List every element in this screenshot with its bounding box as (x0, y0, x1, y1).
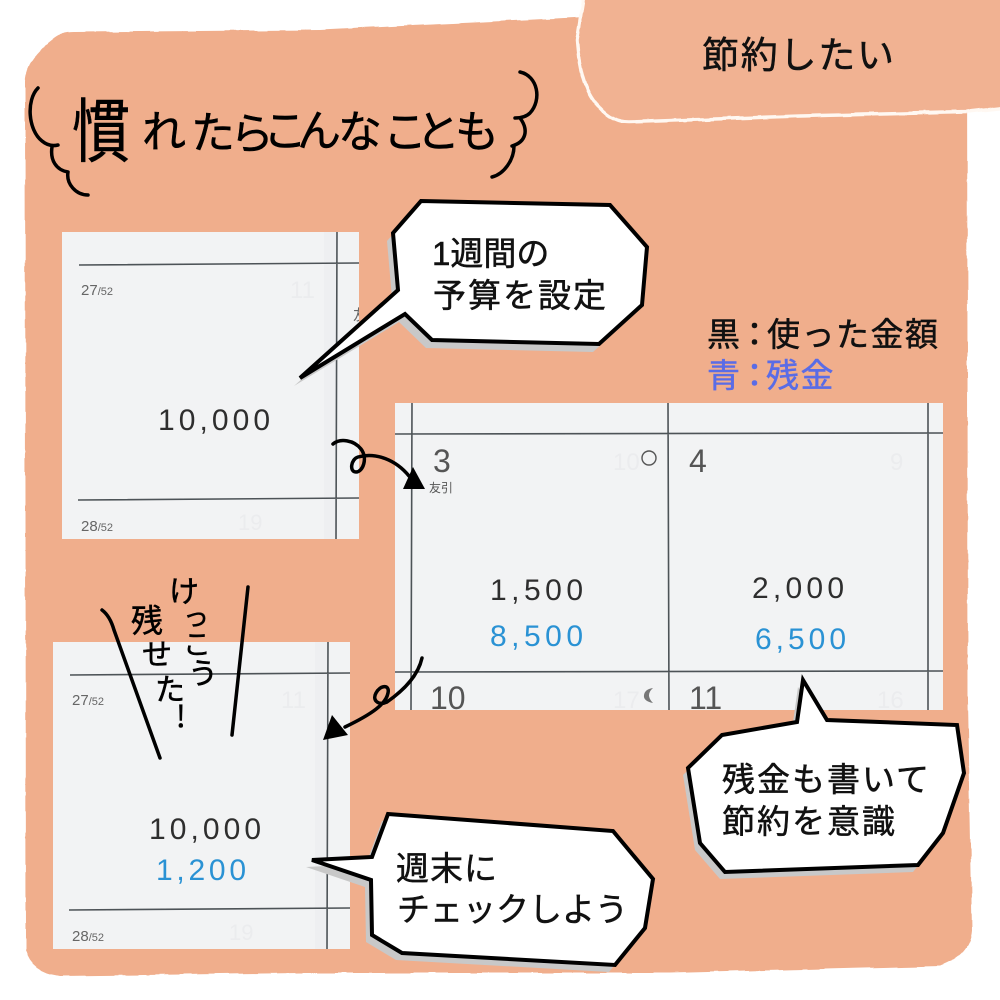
callout: check at the weekend (306, 814, 653, 972)
panel: calendar card 3: 28/52 (72, 928, 104, 945)
arrow: card 1 to card 2 (333, 441, 425, 489)
callout shadow (683, 687, 959, 879)
note text: っ (183, 597, 209, 634)
legend: black is spent amount: 黒 (707, 316, 740, 353)
panel: calendar card 3: 10,000 (149, 813, 261, 846)
panel: calendar card 3: 1,200 (156, 854, 246, 887)
note text: せ (142, 630, 172, 674)
tab shape (577, 0, 1000, 122)
callout shape (312, 814, 653, 965)
callout shadow (294, 209, 641, 386)
handwritten note: saved a lot (102, 567, 248, 758)
panel: calendar card 2: 10 (613, 449, 640, 476)
note text (131, 567, 218, 736)
panel: calendar card 2: 9 (890, 449, 903, 476)
callout shape (300, 201, 647, 378)
panel: calendar card 2: 16 (877, 687, 904, 714)
callout shape (688, 680, 964, 872)
legend: black is spent amount: ： (738, 316, 771, 353)
panel: calendar card 1: 28/52 (81, 518, 113, 535)
note text: 残 (131, 596, 163, 642)
panel: calendar card 2: 11 (689, 680, 722, 716)
callout text: 1週間の (432, 235, 549, 272)
legend: black is spent amount: 使った金額 (767, 316, 940, 353)
panel: calendar card 1 (62, 232, 368, 539)
callout text: 残金も書いて (722, 761, 931, 798)
callout text: 週末に (396, 850, 498, 887)
note text: う (188, 649, 218, 693)
note text: こ (183, 623, 211, 663)
callout text: 節約を意識 (722, 803, 897, 840)
kana: れたらこんなことも (142, 95, 499, 162)
tab: section title (577, 0, 1000, 122)
panel: calendar card 2: 10 (430, 680, 466, 716)
panel: calendar card 3 (53, 642, 350, 949)
note text: け (169, 567, 199, 611)
panel: calendar card 1: 11 (290, 277, 315, 304)
left brace (30, 88, 88, 195)
panel: calendar card 2 (395, 403, 943, 716)
panel: calendar card 2: 4 (689, 443, 707, 479)
panel: calendar card 2: 6,500 (755, 623, 846, 656)
emphasis line left (102, 610, 160, 758)
heading: handwritten title with braces (30, 72, 537, 195)
callout: write the balance too (683, 680, 964, 879)
panel: calendar card 2: 17 (613, 687, 640, 714)
panel: calendar card 2: 2,000 (752, 572, 844, 605)
panel: calendar card 3: 27/52 (72, 692, 104, 709)
arrow: card 2 to card 3 (323, 658, 422, 740)
callout shadow (306, 821, 647, 972)
panel: calendar card 3: 19 (229, 920, 253, 945)
note text: た (155, 665, 185, 709)
panel: calendar card 2: 8,500 (490, 620, 583, 653)
legend (707, 316, 940, 394)
title text: 節約したい (702, 35, 894, 76)
callout text: チェックしよう (397, 891, 628, 928)
panel: calendar card 2: 3 (433, 443, 451, 479)
legend: blue is remaining balance: 残金 (766, 357, 835, 394)
panel: calendar card 3: 11 (281, 687, 306, 714)
handwritten heading text (72, 77, 499, 177)
right brace (492, 72, 537, 177)
first kanji: 慣 (72, 77, 130, 177)
legend: blue is remaining balance: ： (738, 357, 771, 394)
panel: calendar card 2: 1,500 (490, 574, 583, 607)
callout: set weekly budget (294, 201, 647, 386)
panel: calendar card 1: 10,000 (158, 404, 270, 437)
panel: calendar card 1: 19 (238, 510, 262, 535)
emphasis line right (232, 587, 248, 735)
panel: calendar card 2: 友引 (429, 481, 453, 495)
panel: calendar card 1: 友 (353, 307, 368, 324)
legend: blue is remaining balance: 青 (707, 357, 740, 394)
note text: ! (176, 692, 186, 736)
panel: calendar card 1: 27/52 (81, 282, 113, 299)
callout text: 予算を設定 (433, 277, 608, 314)
